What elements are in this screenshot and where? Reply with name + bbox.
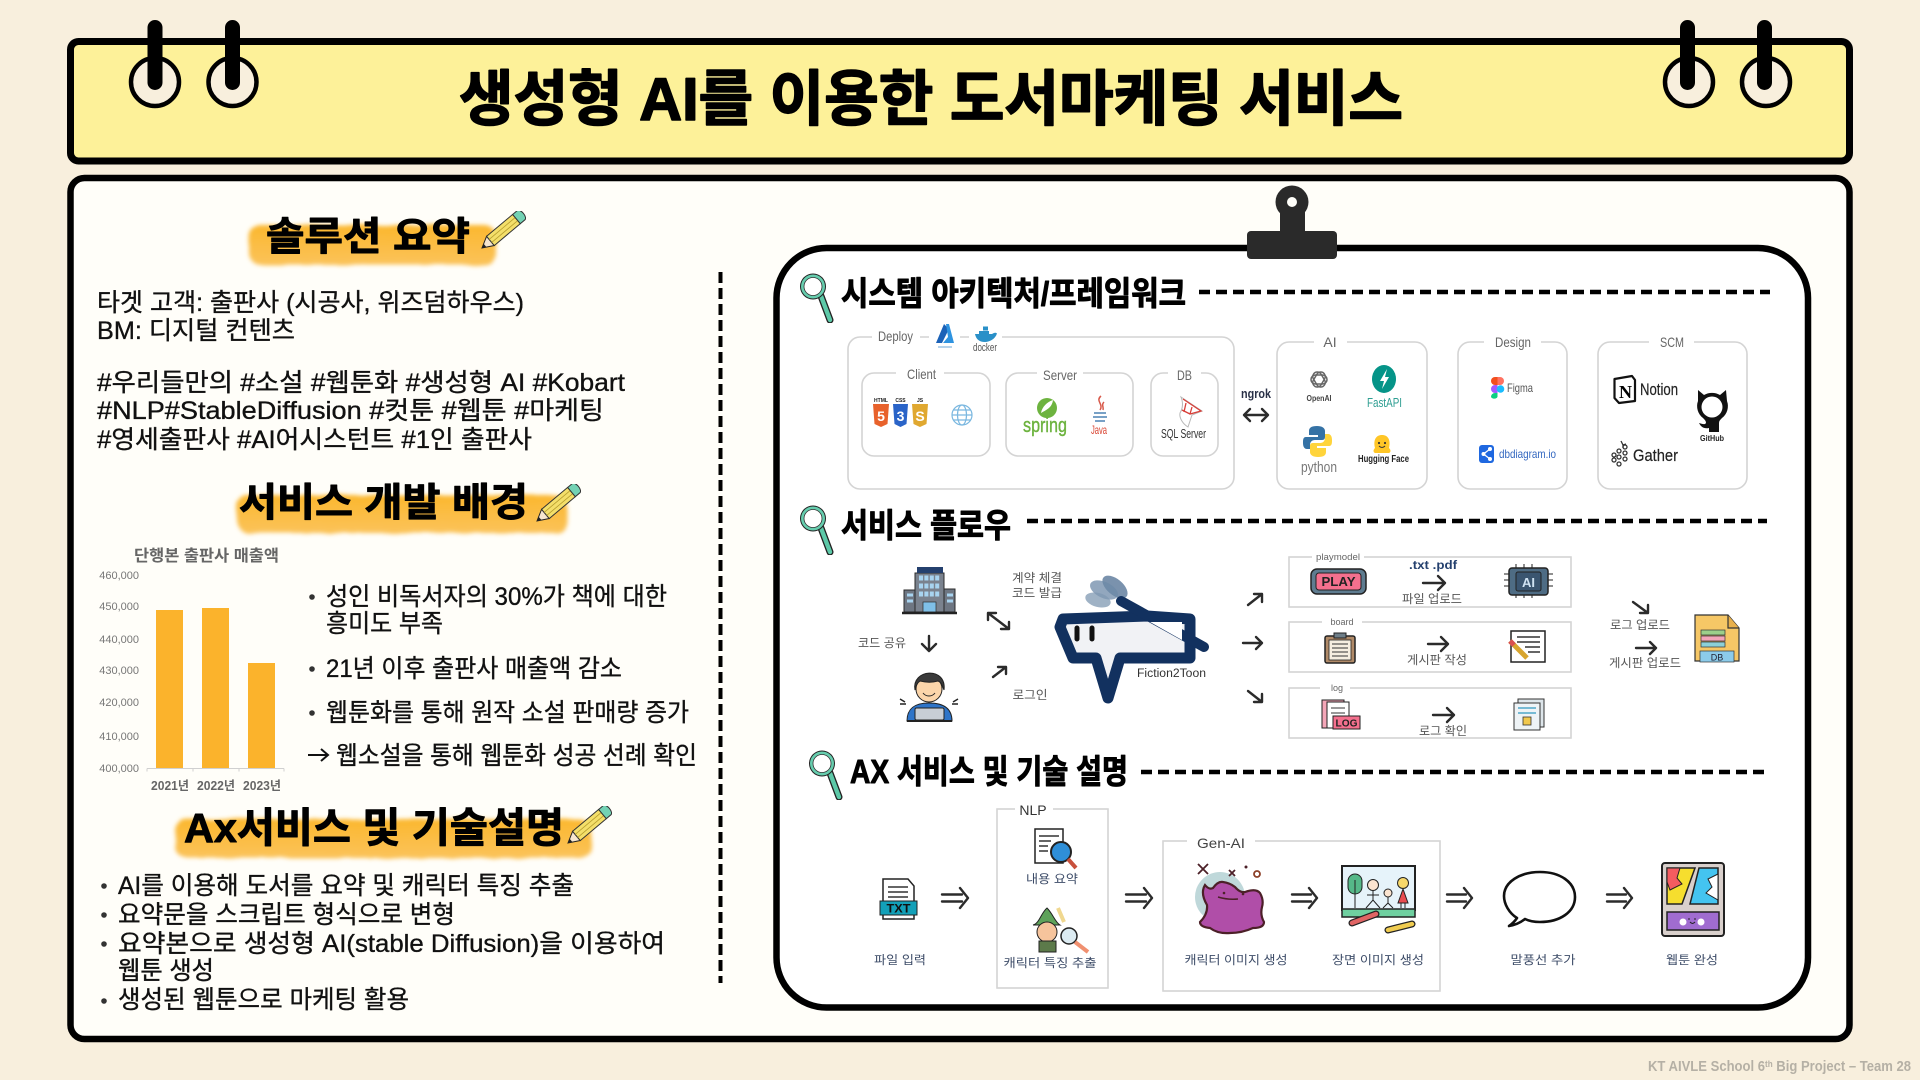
icon: building — [902, 567, 957, 613]
box: board: 게시판 작성 — [1407, 653, 1467, 667]
bar chart: publisher revenue: 400,000 — [99, 763, 139, 775]
group: Gen-AI — [1163, 834, 1440, 991]
bullet list: AX: 생성된 웹툰으로 마케팅 활용 — [118, 986, 409, 1014]
icon: docker — [973, 326, 997, 354]
arrows: to modules — [1243, 594, 1262, 702]
group: Gen-AI: Gen-AI — [1197, 835, 1245, 851]
box: db — [1151, 366, 1218, 456]
arrows and labels: upload: 로그 업로드 — [1610, 618, 1670, 632]
main panel — [70, 178, 1850, 1039]
arrow: double — [1447, 888, 1472, 908]
icon: spring: spring — [1023, 415, 1067, 437]
icon: fastapi: FastAPI — [1367, 396, 1402, 410]
logo: Fiction2Toon: Fiction2Toon — [1137, 668, 1206, 680]
icon: log file — [1322, 700, 1360, 730]
panel: right clipboard — [776, 248, 1808, 1008]
icon: character with magnifier — [1033, 908, 1088, 952]
icon: purple blob character — [1195, 864, 1264, 933]
text: hashtags — [97, 369, 625, 454]
group: NLP: NLP — [1019, 802, 1047, 818]
box: client: Client — [907, 366, 936, 382]
binder rings — [131, 20, 1790, 106]
bullet list: AX: AI를 이용해 도서를 요약 및 캐릭터 특징 추출 — [118, 872, 574, 900]
icon: person — [900, 673, 958, 721]
box: playmodel: 파일 업로드 — [1402, 592, 1462, 606]
section: system architecture — [800, 274, 1770, 489]
section: AX service description — [809, 750, 1770, 991]
icon: gather — [1612, 441, 1678, 466]
icon: play — [1311, 569, 1366, 594]
label: login: 로그인 — [1012, 688, 1048, 702]
icon: figma — [1491, 377, 1533, 399]
panel: solution summary — [97, 209, 625, 454]
icon: openai: OpenAI — [1306, 393, 1332, 403]
box: client — [862, 366, 990, 456]
highlight: AX — [175, 819, 591, 858]
bar chart: publisher revenue: 2023년 — [243, 779, 281, 793]
group: design — [1458, 334, 1567, 489]
group: NLP — [997, 802, 1108, 988]
bullet list: background: 21년 이후 출판사 매출액 감소 — [326, 655, 622, 683]
arrows and labels: upload — [1609, 602, 1681, 670]
step: file input — [874, 879, 926, 967]
group: NLP: 캐릭터 특징 추출 — [1004, 956, 1096, 970]
icon: sql server: SQL Server — [1161, 426, 1206, 441]
box: db: DB — [1177, 367, 1192, 383]
icon: java: Java — [1091, 423, 1107, 437]
logo: Fiction2Toon — [1060, 571, 1206, 698]
icon: dbdiagram — [1479, 445, 1556, 463]
icon: ai chip: AI — [1522, 575, 1535, 590]
icon: document search — [1035, 829, 1076, 868]
bar chart: publisher revenue — [99, 546, 284, 793]
arrow: double — [942, 888, 968, 908]
box: log — [1289, 683, 1571, 738]
label: contract — [1012, 570, 1062, 600]
arrows and labels: upload: 게시판 업로드 — [1609, 656, 1681, 670]
heading: summary: 솔루션 요약 — [266, 216, 470, 259]
box: playmodel: playmodel — [1316, 552, 1360, 562]
bullet list: background — [308, 583, 697, 770]
text: hashtags: #NLP#StableDiffusion #컷툰 #웹툰 #마케팅 — [97, 397, 604, 425]
box: server: Server — [1043, 367, 1077, 383]
bullet list: background: 성인 비독서자의 30%가 책에 대한 — [326, 583, 667, 611]
icon: azure — [936, 324, 954, 347]
heading: service flow: 서비스 플로우 — [841, 507, 1011, 544]
icon: scene drawing — [1342, 866, 1415, 930]
icon: python: python — [1301, 459, 1337, 476]
icon: notion — [1614, 376, 1678, 403]
icon: html css js — [873, 398, 928, 427]
icon: openai — [1306, 370, 1332, 403]
text: hashtags: #우리들만의 #소설 #웹툰화 #생성형 AI #Kobart — [97, 369, 625, 397]
group: Gen-AI: 캐릭터 이미지 생성 — [1184, 953, 1288, 967]
heading: AX: Ax서비스 및 기술설명 — [184, 805, 564, 851]
icon: play: PLAY — [1322, 574, 1356, 589]
title: 생성형 AI를 이용한 도서마케팅 서비스 — [459, 66, 1403, 133]
icon: clipboard — [1325, 633, 1355, 663]
heading: AX description: AX 서비스 및 기술 설명 — [850, 753, 1128, 790]
icon: pencil — [533, 482, 582, 526]
bar chart: publisher revenue: 단행본 출판사 매출액 — [134, 546, 279, 565]
ngrok connector: ngrok — [1241, 386, 1272, 401]
heading: architecture: 시스템 아키텍처/프레임워크 — [841, 275, 1186, 312]
label: contract: 코드 발급 — [1012, 586, 1062, 600]
icon: python — [1301, 426, 1337, 476]
box: server — [1006, 366, 1133, 456]
step: speech bubble: 말풍선 추가 — [1510, 953, 1576, 967]
panel: AX service — [101, 804, 665, 1014]
ngrok connector — [1241, 386, 1272, 421]
bar chart: publisher revenue: 410,000 — [99, 731, 139, 743]
icon: html css js: S — [915, 408, 925, 424]
panel: service background — [99, 482, 697, 793]
text: target customer and BM — [97, 289, 524, 345]
step: webtoon — [1662, 863, 1724, 967]
bullet list: background: 흥미도 부족 — [326, 610, 443, 638]
group: AI — [1277, 334, 1427, 489]
box: board — [1289, 617, 1571, 672]
group: deploy: Deploy — [878, 328, 913, 344]
label: contract: 계약 체결 — [1012, 570, 1062, 585]
icon: fastapi — [1367, 365, 1402, 410]
group: deploy — [848, 324, 1234, 489]
icon: ai chip — [1504, 564, 1553, 598]
text: target customer and BM: BM: 디지털 컨텐츠 — [97, 317, 295, 345]
bullet list: AX — [101, 872, 665, 1014]
group: AI: AI — [1323, 334, 1337, 350]
box: log: log — [1331, 683, 1343, 693]
bullet list: AX: 요약본으로 생성형 AI(stable Diffusion)을 이용하여 — [118, 930, 665, 958]
text: hashtags: #영세출판사 #AI어시스턴트 #1인 출판사 — [97, 426, 532, 454]
icon: docker: docker — [973, 342, 997, 354]
bar chart: publisher revenue: 2021년 — [151, 779, 189, 793]
bullet list: AX: 요약문을 스크립트 형식으로 변형 — [118, 901, 455, 929]
icon: binder clip — [1247, 186, 1337, 259]
icon: html css js: 3 — [897, 408, 905, 424]
icon: hugging face — [1358, 435, 1409, 465]
box: board: board — [1330, 617, 1354, 627]
highlight: background — [237, 495, 567, 533]
group: scm: SCM — [1660, 334, 1684, 350]
icon: dbdiagram: dbdiagram.io — [1499, 447, 1556, 461]
group: Gen-AI: 장면 이미지 생성 — [1332, 953, 1424, 967]
arrow: two-way — [988, 613, 1009, 629]
header banner — [70, 42, 1850, 161]
bar chart: publisher revenue: 430,000 — [99, 665, 139, 677]
vertical dashed divider — [718, 272, 722, 983]
icon: magnifier — [800, 506, 830, 552]
icon: documents — [1514, 699, 1544, 730]
arrow: double — [1292, 888, 1317, 908]
step: file input: 파일 입력 — [874, 953, 926, 967]
icon: db file: DB — [1711, 652, 1723, 662]
box: log: 로그 확인 — [1419, 724, 1467, 738]
icon: magnifier — [800, 274, 830, 320]
icon: globe — [952, 405, 972, 425]
step: webtoon: 웹툰 완성 — [1666, 953, 1718, 967]
highlight: summary — [249, 225, 496, 265]
icon: html css js: JS — [917, 398, 924, 404]
box: playmodel — [1289, 552, 1571, 607]
arrow: double — [1126, 888, 1152, 908]
icon: github — [1697, 390, 1728, 443]
bar chart: publisher revenue: 440,000 — [99, 634, 139, 646]
bar chart: publisher revenue: 2022년 — [197, 779, 235, 793]
icon: log file: LOG — [1336, 718, 1358, 730]
bar chart: publisher revenue: 420,000 — [99, 697, 139, 709]
step: file input: TXT — [886, 902, 911, 916]
box: playmodel: .txt .pdf — [1409, 558, 1458, 572]
icon: pencil — [564, 804, 613, 848]
icon: document with pencil — [1510, 631, 1545, 662]
label: code share: 코드 공유 — [858, 636, 906, 650]
group: NLP: 내용 요약 — [1026, 871, 1078, 886]
icon: html css js: HTML — [874, 398, 888, 404]
icon: notion: N — [1619, 382, 1632, 402]
group: scm — [1598, 334, 1747, 489]
bullet list: AX: 웹툰 생성 — [118, 957, 214, 985]
icon: pencil — [478, 209, 527, 253]
icon: db file — [1695, 615, 1739, 662]
bullet list: background: 웹툰화를 통해 원작 소설 판매량 증가 — [326, 699, 689, 727]
arrow: login — [993, 667, 1006, 677]
arrow: double — [1607, 888, 1632, 908]
bullet list: background: 웹소설을 통해 웹툰화 성공 선례 확인 — [336, 742, 697, 770]
icon: github: GitHub — [1700, 433, 1724, 443]
icon: gather: Gather — [1633, 446, 1678, 465]
group: design: Design — [1495, 334, 1531, 350]
text: target customer and BM: 타겟 고객: 출판사 (시공사, 위즈덤하우스) — [97, 289, 524, 317]
footer credit: th — [1765, 1059, 1773, 1069]
bar chart: publisher revenue: 450,000 — [99, 601, 139, 613]
footer credit: KT AIVLE School 6 — [1648, 1059, 1778, 1075]
icon: notion: Notion — [1640, 380, 1678, 399]
step: speech bubble — [1504, 872, 1576, 967]
section: service flow — [800, 506, 1767, 738]
icon: magnifier — [809, 750, 839, 797]
bar chart: publisher revenue: 460,000 — [99, 570, 139, 582]
icon: html css js: 5 — [877, 408, 885, 424]
icon: html css js: CSS — [895, 398, 906, 404]
heading: background: 서비스 개발 배경 — [239, 482, 528, 525]
icon: hugging face: Hugging Face — [1358, 454, 1409, 465]
arrow: down — [922, 636, 936, 651]
icon: figma: Figma — [1507, 381, 1533, 395]
